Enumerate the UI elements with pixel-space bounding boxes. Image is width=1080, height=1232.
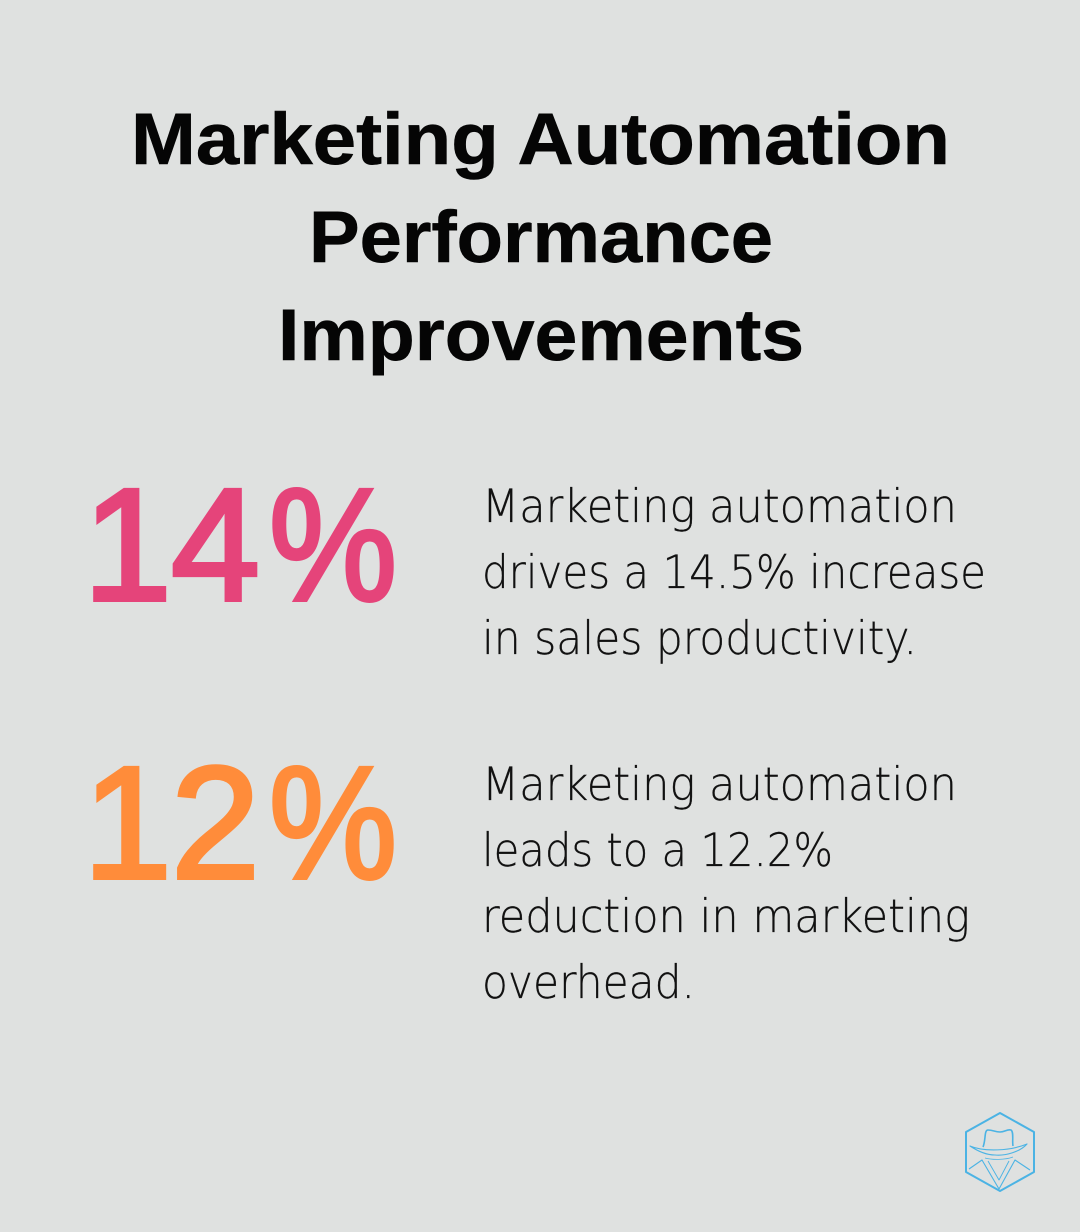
text: marketing overhead — [482, 757, 970, 1009]
text: sales productivity: drives a 14.5% increase — [482, 545, 986, 599]
text: sales productivity: in sales productivity. — [482, 611, 917, 665]
text: marketing overhead: overhead. — [482, 955, 695, 1009]
title: Performance — [309, 197, 773, 278]
title — [131, 99, 950, 376]
text: marketing overhead: Marketing automation — [482, 757, 957, 811]
title: Improvements — [278, 295, 804, 376]
stat: 12% — [83, 733, 397, 912]
stat: 14% — [83, 455, 397, 634]
stat: 14%: % — [269, 455, 397, 634]
stat: 12%: % — [269, 733, 397, 912]
text: sales productivity: Marketing automation — [482, 479, 957, 533]
text: marketing overhead: reduction in marketing — [482, 889, 970, 943]
icon: logo hexagon with hat — [966, 1113, 1034, 1191]
text: sales productivity — [482, 479, 986, 665]
stat: 14%: 14 — [83, 455, 260, 634]
title: Marketing Automation — [131, 99, 950, 180]
text: marketing overhead: leads to a 12.2% — [482, 823, 833, 877]
stat: 12%: 12 — [83, 733, 260, 912]
